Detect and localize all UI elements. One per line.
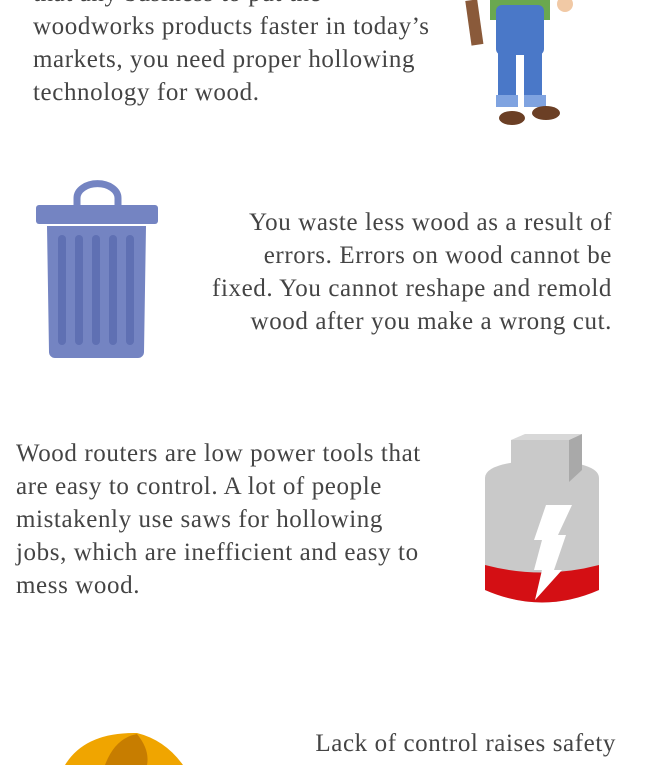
text block: waste less wood: errors. Errors on wood cannot be xyxy=(264,242,612,269)
text block: wood routers: mess wood. xyxy=(16,572,140,599)
text block: waste less wood: fixed. You cannot reshape and remold xyxy=(212,275,612,302)
text block: intro xyxy=(33,0,430,106)
text block: wood routers: jobs, which are inefficient and easy to xyxy=(16,539,419,566)
text block: waste less wood xyxy=(212,209,612,335)
icon: trash can xyxy=(36,180,158,358)
text block: waste less wood: wood after you make a wrong cut. xyxy=(251,308,612,335)
text block: wood routers: mistakenly use saws for hollowing xyxy=(16,506,383,533)
text block: lack of control: Lack of control raises safety xyxy=(315,730,616,757)
text block: waste less wood: You waste less wood as a result of xyxy=(249,209,612,236)
text block: intro: markets, you need proper hollowing xyxy=(33,46,415,73)
text block: intro: woodworks products faster in today’s xyxy=(33,13,430,40)
icon: helmet xyxy=(65,733,183,765)
text block: wood routers: Wood routers are low power tools that xyxy=(16,440,421,467)
text block: wood routers: are easy to control. A lot of people xyxy=(16,473,382,500)
icon: worker xyxy=(465,0,573,125)
icon: battery xyxy=(485,434,599,602)
text block: intro: technology for wood. xyxy=(33,79,260,106)
text block: wood routers xyxy=(15,440,421,599)
